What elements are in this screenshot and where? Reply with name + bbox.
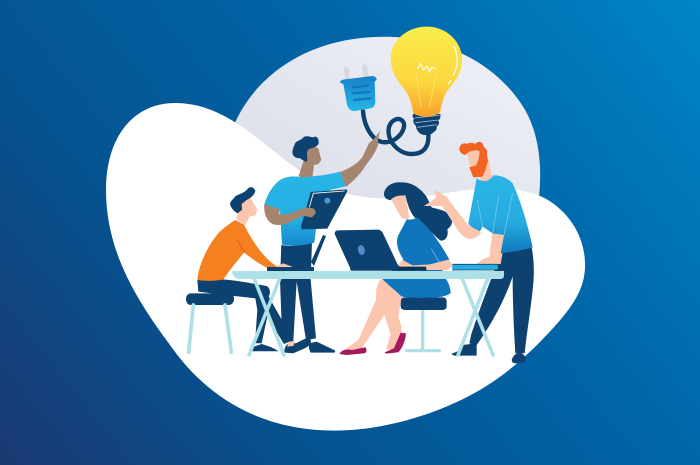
stool seat (401, 297, 447, 310)
legs (343, 278, 402, 351)
hair (230, 187, 255, 213)
support forearm and hand (477, 230, 506, 264)
plug prongs (344, 64, 369, 81)
woman seated (335, 182, 453, 355)
table (232, 267, 504, 355)
head and neck (236, 193, 257, 225)
raised arm left forearm (264, 204, 316, 225)
bulb socket (413, 114, 440, 135)
laptop base (350, 267, 427, 271)
tablet (301, 189, 347, 229)
hair (384, 182, 452, 241)
right shoe (512, 353, 526, 363)
shoes (252, 344, 278, 351)
forearm (397, 259, 453, 270)
left laptop base (267, 267, 314, 271)
thin laptop screen (311, 235, 326, 266)
stool post (407, 308, 439, 351)
bulb highlight (448, 47, 457, 85)
hand on tablet (302, 207, 316, 217)
shirt seams (477, 193, 513, 235)
sock accents (287, 341, 295, 347)
blue tablet (452, 264, 498, 270)
laptop logo (357, 244, 366, 256)
pants (197, 279, 293, 344)
filament supports (416, 72, 437, 107)
tablet camera (324, 198, 330, 204)
standing man with tablet (264, 136, 347, 353)
laptop screen (335, 230, 399, 271)
stool seat (186, 293, 234, 305)
t-shirt (264, 172, 347, 245)
plug (340, 64, 377, 111)
socket threads (415, 115, 439, 127)
plug vents (353, 86, 371, 100)
white front blob (106, 103, 585, 431)
dress (382, 217, 451, 298)
neck and head (467, 148, 493, 182)
dress fold (431, 249, 440, 263)
neck and head (299, 145, 321, 178)
orange sweater (197, 220, 277, 281)
shirt (468, 175, 533, 253)
standing man with red beard (451, 142, 534, 363)
hair (292, 136, 319, 161)
shoes (339, 333, 406, 355)
pants (280, 243, 316, 342)
pants (469, 247, 534, 353)
light bulb (391, 27, 462, 135)
table legs (249, 278, 493, 355)
stool legs (189, 305, 231, 352)
left shoe (451, 343, 477, 356)
tablet highlight (309, 191, 345, 207)
hair (459, 142, 487, 155)
hand (271, 263, 294, 267)
bulb glass (391, 27, 462, 117)
seated man (186, 187, 295, 352)
table top (232, 271, 504, 279)
face and neck (391, 195, 409, 219)
shoes (284, 337, 335, 353)
filament (417, 63, 436, 72)
plug body (340, 76, 377, 111)
beard (469, 150, 488, 177)
cable (363, 111, 428, 154)
gray back blob (232, 37, 540, 215)
sweater fold (237, 239, 244, 253)
pointing arm (424, 190, 481, 239)
raised arm (340, 131, 380, 187)
